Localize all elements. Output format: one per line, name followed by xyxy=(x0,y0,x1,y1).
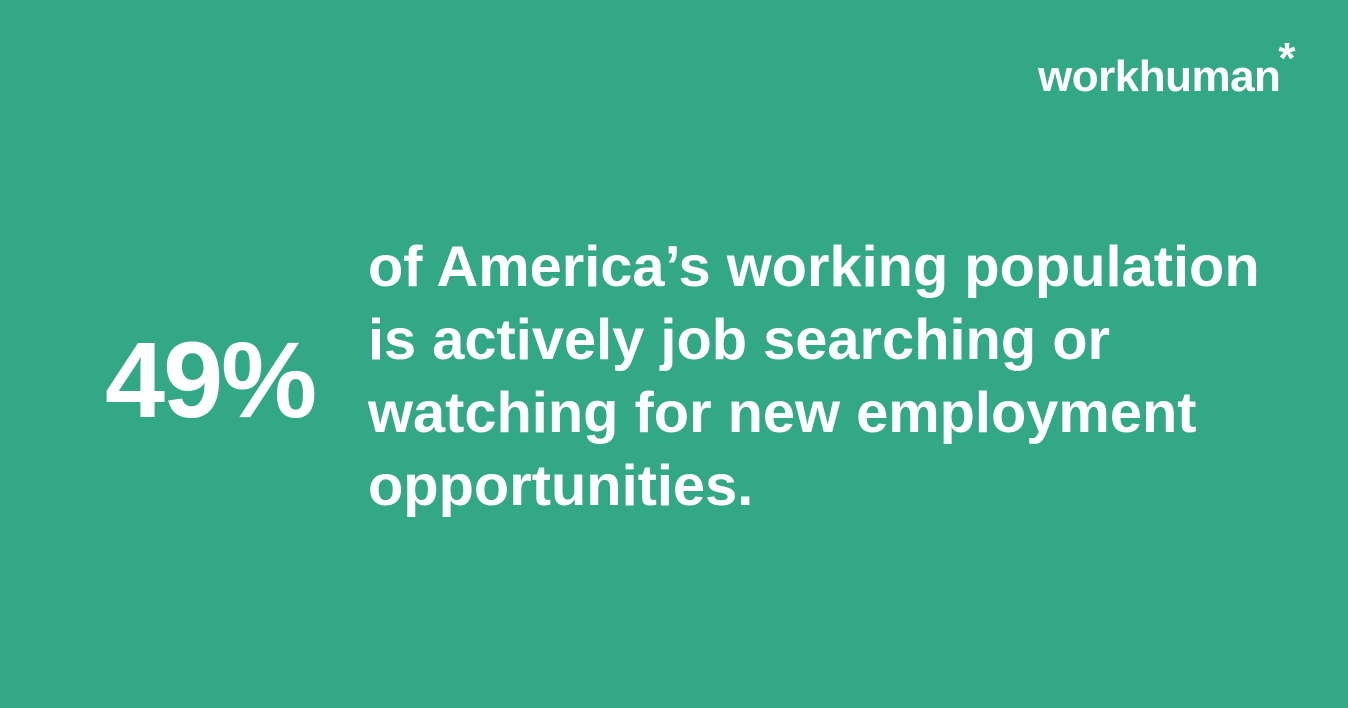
logo: workhuman: workhuman* xyxy=(1038,34,1295,101)
big stat: 49%: 49% xyxy=(105,319,315,440)
statement text xyxy=(368,235,1260,518)
statement text: is actively job searching or xyxy=(368,308,1110,372)
statement text: watching for new employment xyxy=(368,381,1197,445)
statement text: of America’s working population xyxy=(368,235,1260,299)
statement text: opportunities. xyxy=(368,454,753,518)
